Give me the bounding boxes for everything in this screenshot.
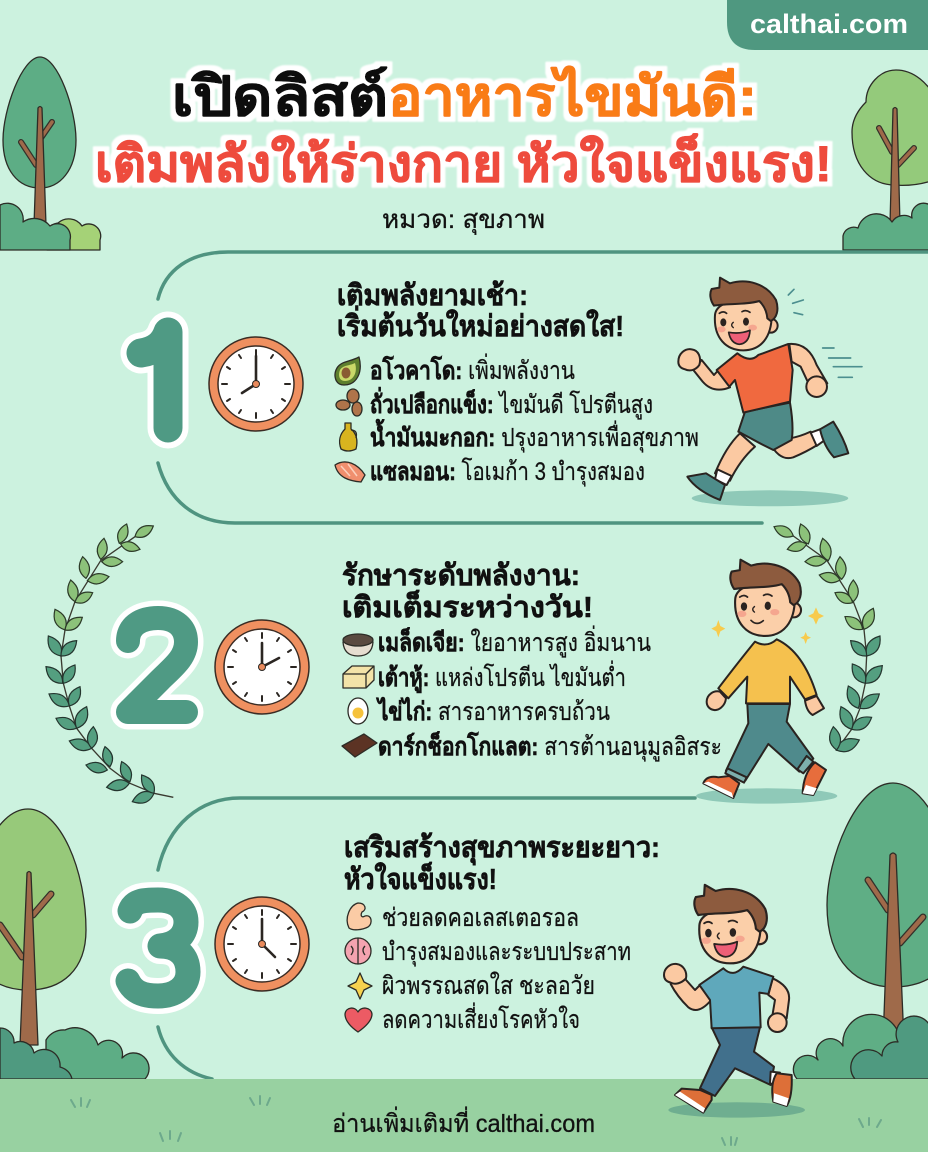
clock 3 (215, 897, 309, 991)
list 1: อโวคาโด: เพิ่มพลังงาน (370, 353, 575, 385)
heading 2: รักษาระดับพลังงาน: (342, 560, 580, 592)
badge: calthai.com: calthai.com (750, 9, 908, 39)
list 2: เมล็ดเจีย: ใยอาหารสูง อิ่มนาน (378, 625, 651, 658)
panel: section 2 (128, 560, 837, 804)
laurel: left (42, 522, 173, 807)
tree: top left (0, 57, 101, 250)
panel: section 3 (128, 798, 695, 1079)
tree: bottom left (0, 809, 149, 1079)
icon: avocado (335, 357, 360, 385)
title: เปิดลิสต์ (172, 66, 388, 127)
runner 1 (678, 278, 862, 506)
icon: chia bowl (343, 634, 373, 656)
icon: tofu (343, 666, 374, 688)
icon: salmon (335, 462, 365, 482)
clock 1 (209, 337, 303, 431)
icon: nuts (336, 389, 362, 416)
clock 2 (215, 620, 309, 714)
icon: olive oil (340, 423, 357, 451)
walker 2 (696, 560, 837, 804)
title: เติมพลังให้ร่างกาย หัวใจแข็งแรง! (95, 133, 832, 192)
list 3 (382, 904, 631, 1034)
footer text: อ่านเพิ่มเติมที่ calthai.com (332, 1106, 595, 1138)
list 2: ดาร์กช็อกโกแลต: สารต้านอนุมูลอิสระ (378, 731, 722, 762)
heading 1 line 2: เริ่มต้นวันใหม่อย่างสดใส! (337, 305, 624, 343)
title (95, 65, 832, 192)
list 3: ช่วยลดคอเลสเตอรอล (382, 904, 579, 932)
number 2 (128, 618, 186, 712)
list 1: ถั่วเปลือกแข็ง: ไขมันดี โปรตีนสูง (370, 387, 653, 420)
list 1: แซลมอน: โอเมก้า 3 บำรุงสมอง (370, 457, 645, 487)
number 3 (128, 900, 188, 996)
runner 3 (664, 885, 805, 1118)
list 3: บำรุงสมองและระบบประสาท (382, 938, 631, 967)
panel: section 1 (141, 252, 928, 523)
title: อาหารไขมันดี: (388, 65, 757, 127)
badge: calthai.com (727, 0, 928, 50)
tree: bottom right (793, 783, 928, 1079)
icon: chocolate (342, 734, 377, 757)
ground (0, 1079, 928, 1152)
icon: egg (348, 698, 368, 724)
heading 3 line 2: หัวใจแข็งแรง! (344, 861, 497, 896)
icon: sparkles (348, 973, 372, 999)
list 2: ไข่ไก่: สารอาหารครบถ้วน (376, 696, 610, 726)
list 3: ลดความเสี่ยงโรคหัวใจ (382, 1002, 580, 1034)
heading 2 line 2: เติมเต็มระหว่างวัน! (342, 589, 593, 624)
heading 1: เติมพลังยามเช้า: (337, 280, 528, 312)
number 1 (141, 332, 168, 428)
laurel: right (772, 522, 886, 755)
list 1 (370, 353, 699, 487)
category label: หมวด: สุขภาพ (382, 204, 545, 235)
list 2: เต้าหู้: แหล่งโปรตีน ไขมันต่ำ (378, 660, 626, 694)
list 2 (376, 625, 722, 762)
list 3: ผิวพรรณสดใส ชะลอวัย (382, 971, 595, 1000)
list 1: น้ำมันมะกอก: ปรุงอาหารเพื่อสุขภาพ (370, 418, 699, 453)
icon: brain (345, 938, 371, 964)
tree: top right (843, 70, 928, 250)
icon: arm (347, 903, 371, 930)
icon: heart (345, 1008, 372, 1032)
heading 3: เสริมสร้างสุขภาพระยะยาว: (344, 832, 660, 865)
